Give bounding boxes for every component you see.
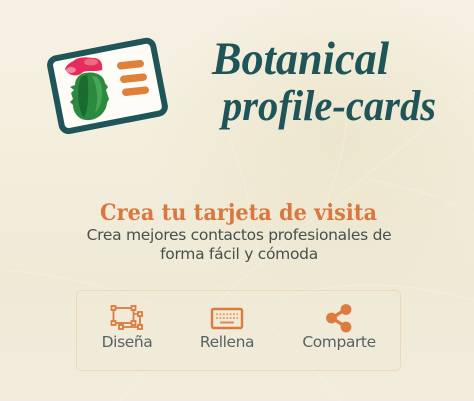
icon: design shapes — [110, 305, 143, 330]
cactus flower — [65, 57, 102, 75]
icon: share — [326, 304, 352, 332]
card outline — [49, 40, 166, 132]
subtitle: forma fácil y cómoda — [160, 244, 318, 262]
logo icon: profile card with cactus — [47, 38, 168, 134]
logo wordmark: Botanical — [211, 33, 389, 85]
icon: keyboard — [210, 308, 244, 330]
panel: steps — [76, 290, 401, 371]
subtitle — [87, 226, 391, 262]
card lines — [117, 60, 149, 96]
subtitle: Crea mejores contactos profesionales de — [87, 226, 391, 244]
logo wordmark — [211, 33, 436, 130]
label: Comparte: Comparte — [302, 333, 376, 351]
logo wordmark: profile-cards — [218, 83, 436, 130]
label: Diseña: Diseña — [102, 333, 152, 351]
heading: Crea tu tarjeta de visita — [100, 200, 377, 226]
cactus body — [70, 72, 109, 120]
label: Rellena: Rellena — [200, 333, 254, 351]
